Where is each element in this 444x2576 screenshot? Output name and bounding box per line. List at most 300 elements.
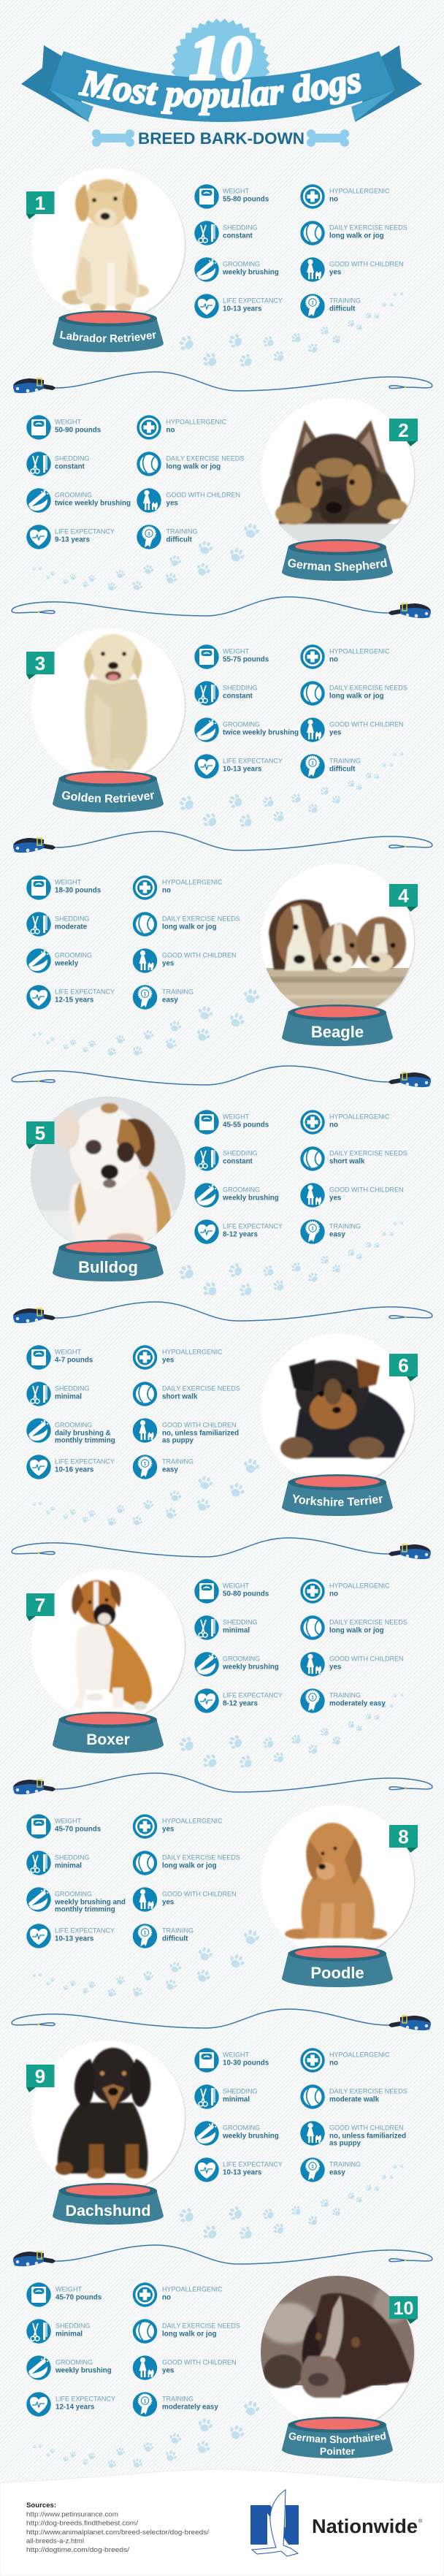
stats: [26, 2282, 240, 2417]
bowl: Yorkshire Terrier: [282, 1474, 393, 1516]
icon: left bone: [92, 129, 134, 147]
bowl: Yorkshire Terrier: Yorkshire Terrier: [292, 1495, 383, 1506]
hypoallergenic: [133, 1345, 223, 1370]
grooming: GROOMING: [223, 1655, 260, 1662]
panel: 7 Boxer: [26, 1569, 407, 1772]
panel: 2 German Shepherd: [26, 398, 418, 590]
hypoallergenic: HYPOALLERGENIC: [162, 1348, 223, 1355]
life expectancy: LIFE EXPECTANCY: [223, 757, 283, 764]
life expectancy: 10-13 years: [223, 305, 262, 313]
weight: [194, 1579, 269, 1604]
bowl: Dachshund: Dachshund: [65, 2202, 151, 2219]
grooming: twice weekly brushing: [55, 500, 131, 507]
life expectancy: 8-12 years: [223, 1230, 258, 1239]
children: yes: [329, 729, 342, 736]
training: TRAINING: [162, 1457, 194, 1465]
dog: boxer: [72, 1580, 152, 1710]
children: yes: [329, 269, 342, 276]
children: [133, 2355, 237, 2380]
training: easy: [329, 1230, 345, 1239]
sources: http://dogtime.com/dog-breeds/: [26, 2546, 129, 2554]
weight: WEIGHT: [55, 1348, 81, 1355]
photo and bowl: [31, 628, 403, 827]
icon: right bone: [307, 129, 349, 147]
bowl: German Shorthaired Pointer: Pointer: [320, 2445, 356, 2457]
grooming: [194, 2121, 279, 2146]
exercise: DAILY EXERCISE NEEDS: [162, 1384, 240, 1392]
training: [300, 754, 361, 779]
bowl: Bulldog: Bulldog: [78, 1258, 138, 1276]
training: 1: [144, 2399, 147, 2404]
training: 1: [311, 301, 314, 305]
paw trail: [176, 751, 405, 831]
training: 1: [148, 532, 150, 536]
weight: WEIGHT: [55, 878, 81, 885]
shedding: [26, 1851, 90, 1875]
shedding: SHEDDING: [223, 2087, 258, 2095]
hypoallergenic: HYPOALLERGENIC: [162, 1817, 223, 1824]
exercise: long walk or jog: [162, 2331, 217, 2338]
training: TRAINING: [162, 2395, 194, 2402]
dog: golden retriever: [84, 634, 148, 771]
life expectancy: LIFE EXPECTANCY: [223, 297, 283, 304]
photo and bowl: [31, 864, 415, 1058]
grooming: [26, 1887, 126, 1914]
badge 9: 9: [35, 2065, 45, 2087]
life expectancy: LIFE EXPECTANCY: [56, 2395, 115, 2402]
header: [21, 19, 422, 148]
shedding: [194, 221, 258, 245]
shedding: minimal: [55, 1861, 82, 1870]
badge 7: 7: [35, 1594, 45, 1616]
photo and bowl: [31, 1805, 415, 1999]
photo and bowl: [31, 1097, 405, 1300]
bowl: Golden Retriever: Golden Retriever: [62, 791, 154, 802]
exercise: long walk or jog: [162, 1861, 217, 1870]
hypoallergenic: no: [162, 887, 171, 894]
grooming: weekly brushing: [222, 269, 279, 276]
grooming: twice weekly brushing: [223, 729, 299, 736]
paw trail: [176, 1692, 405, 1772]
grooming: GROOMING: [55, 491, 92, 498]
grooming: [194, 1652, 279, 1677]
life expectancy: [26, 525, 115, 549]
hypoallergenic: [133, 2282, 223, 2307]
stats: [194, 644, 407, 779]
life expectancy: 8-12 years: [223, 1699, 258, 1708]
leash divider 6: [12, 1538, 431, 1559]
bowl: German Shorthaired Pointer: [282, 2417, 393, 2458]
children: [133, 1887, 237, 1912]
shedding: moderate: [55, 923, 88, 931]
badge 6: [389, 1354, 418, 1382]
shedding: constant: [223, 693, 253, 700]
stats: [26, 415, 244, 549]
paw trail: [176, 1220, 405, 1300]
bowl: Labrador Retriever: Labrador Retriever: [60, 330, 156, 342]
badge 6: 6: [398, 1354, 409, 1376]
hypoallergenic: HYPOALLERGENIC: [162, 2285, 223, 2293]
children: GOOD WITH CHILDREN: [329, 1186, 404, 1193]
leash divider 4: [12, 1066, 431, 1087]
dog: bulldog: [41, 1102, 175, 1242]
grooming: weekly brushing and: [54, 1898, 126, 1907]
children: [300, 1652, 404, 1677]
shedding: SHEDDING: [55, 915, 90, 922]
grooming: weekly brushing: [55, 2367, 112, 2374]
hypoallergenic: HYPOALLERGENIC: [166, 418, 227, 425]
shedding: SHEDDING: [55, 454, 90, 462]
exercise: [137, 451, 244, 476]
paw trail: [31, 987, 261, 1058]
children: [300, 1183, 404, 1208]
sources: http://www.petinsurance.com: [26, 2510, 118, 2519]
shedding: SHEDDING: [56, 2322, 91, 2329]
exercise: [300, 2084, 407, 2109]
training: easy: [162, 997, 178, 1004]
grooming: GROOMING: [55, 1890, 92, 1897]
exercise: long walk or jog: [166, 463, 221, 470]
children: as puppy: [329, 2139, 361, 2148]
training: TRAINING: [162, 1927, 194, 1934]
hypoallergenic: no: [329, 1590, 338, 1598]
shedding: minimal: [223, 2095, 250, 2104]
photo and bowl: [31, 1569, 405, 1772]
weight: [26, 415, 102, 440]
training: moderately easy: [329, 1699, 386, 1708]
photo and bowl: [261, 398, 415, 581]
badge 8: [389, 1825, 418, 1853]
children: yes: [166, 500, 178, 507]
grooming: weekly brushing: [222, 1663, 279, 1672]
panel: 3 Golden Retriever: [26, 628, 407, 827]
exercise: DAILY EXERCISE NEEDS: [162, 915, 240, 922]
training: TRAINING: [166, 527, 198, 535]
children: no, unless familiarized: [162, 1429, 239, 1438]
grooming: [26, 2355, 112, 2380]
children: no, unless familiarized: [329, 2132, 406, 2141]
grooming: GROOMING: [223, 1186, 260, 1193]
life expectancy: [26, 2392, 115, 2417]
shedding: constant: [55, 463, 85, 470]
hypoallergenic: [137, 415, 227, 440]
hypoallergenic: [300, 644, 390, 669]
training: 1: [311, 1695, 314, 1701]
badge 1: 1: [35, 192, 45, 214]
sources: all-breeds-a-z.html: [26, 2537, 84, 2545]
bowl: German Shepherd: [282, 539, 393, 581]
weight: [194, 2048, 269, 2073]
photo and bowl: [31, 168, 185, 352]
weight: [26, 875, 102, 900]
bowl: Golden Retriever: [53, 771, 164, 812]
children: [300, 2121, 406, 2148]
paw trail: [176, 291, 405, 370]
weight: WEIGHT: [223, 647, 249, 655]
hypoallergenic: HYPOALLERGENIC: [329, 647, 390, 655]
children: [300, 717, 404, 742]
ribbon banner: [21, 45, 422, 122]
leash divider 2: [12, 597, 431, 618]
weight: 55-80 pounds: [223, 196, 269, 203]
weight: 45-70 pounds: [56, 2294, 102, 2301]
children: as puppy: [162, 1436, 194, 1445]
children: GOOD WITH CHILDREN: [329, 2124, 404, 2131]
hypoallergenic: HYPOALLERGENIC: [329, 2051, 390, 2058]
life expectancy: [26, 1924, 115, 1948]
wordmark: Nationwide: [312, 2515, 418, 2537]
training: TRAINING: [162, 988, 194, 995]
hypoallergenic: [133, 875, 223, 900]
weight: 4-7 pounds: [55, 1356, 93, 1365]
bowl: Beagle: Beagle: [311, 1023, 364, 1041]
training: difficult: [162, 1935, 188, 1943]
grooming: weekly brushing: [222, 2132, 279, 2141]
leash divider 8: [12, 2009, 431, 2030]
bowl: Poodle: [282, 1946, 393, 1987]
shedding: [26, 912, 90, 937]
shedding: minimal: [55, 1392, 82, 1401]
training: [300, 1688, 386, 1713]
training: difficult: [329, 766, 356, 773]
badge 3: [26, 652, 54, 679]
exercise: DAILY EXERCISE NEEDS: [329, 224, 407, 231]
bowl: Beagle: [282, 1005, 393, 1046]
training: easy: [162, 1466, 178, 1474]
children: GOOD WITH CHILDREN: [329, 260, 404, 267]
grooming: GROOMING: [223, 2124, 260, 2131]
shedding: constant: [223, 1157, 253, 1166]
children: yes: [162, 1898, 175, 1907]
title: Most popular dogs: Most popular dogs: [77, 70, 361, 115]
weight: WEIGHT: [56, 2285, 82, 2293]
training: difficult: [166, 536, 193, 544]
life expectancy: 9-13 years: [55, 536, 90, 544]
exercise: DAILY EXERCISE NEEDS: [162, 1853, 240, 1861]
hypoallergenic: [133, 1814, 223, 1839]
paw trail: [176, 2163, 405, 2243]
title: 10: 10: [189, 23, 252, 93]
children: GOOD WITH CHILDREN: [329, 1655, 404, 1662]
shedding: SHEDDING: [223, 1618, 258, 1626]
weight: 50-80 pounds: [223, 1590, 269, 1598]
grooming: [26, 1418, 115, 1445]
grooming: [26, 948, 92, 973]
photo and bowl: [32, 1333, 415, 1525]
training: [133, 985, 194, 1010]
sources: [26, 2501, 209, 2554]
weight: WEIGHT: [223, 1113, 249, 1120]
exercise: [300, 221, 407, 245]
badge 8: 8: [398, 1826, 409, 1848]
stats: [194, 1110, 407, 1244]
grooming: GROOMING: [223, 720, 260, 728]
panel: 5 Bulldog: [26, 1097, 407, 1300]
hypoallergenic: HYPOALLERGENIC: [329, 187, 390, 194]
shedding: SHEDDING: [55, 1384, 90, 1392]
training: [300, 294, 361, 319]
sunburst behind 10: [171, 18, 270, 118]
life expectancy: [26, 985, 115, 1010]
hypoallergenic: no: [329, 656, 338, 663]
exercise: DAILY EXERCISE NEEDS: [329, 1618, 407, 1626]
exercise: DAILY EXERCISE NEEDS: [329, 684, 407, 691]
weight: [194, 1110, 269, 1135]
exercise: [133, 1851, 240, 1875]
life expectancy: LIFE EXPECTANCY: [55, 1927, 115, 1934]
paw trail: [31, 522, 261, 592]
exercise: DAILY EXERCISE NEEDS: [166, 454, 244, 462]
grooming: GROOMING: [56, 2358, 93, 2366]
shedding: minimal: [223, 1626, 250, 1635]
bowl: German Shorthaired Pointer: German Shorthaired: [289, 2431, 386, 2443]
grooming: weekly brushing: [222, 1194, 279, 1203]
hypoallergenic: yes: [162, 1356, 175, 1365]
stats: [194, 184, 407, 319]
exercise: long walk or jog: [329, 232, 384, 240]
badge 2: 2: [398, 419, 409, 441]
training: TRAINING: [329, 2160, 361, 2168]
training: 1: [311, 1226, 314, 1232]
exercise: [133, 1382, 240, 1406]
weight: WEIGHT: [55, 1817, 81, 1824]
paw trail: [31, 1457, 261, 1528]
leash divider 3: [13, 831, 432, 853]
leash divider 9: [13, 2245, 432, 2266]
panel: 9 Dachshund: [26, 2040, 407, 2243]
training: TRAINING: [329, 1691, 361, 1699]
exercise: [133, 912, 240, 937]
panel: 4 Beagle: [26, 864, 418, 1058]
weight: WEIGHT: [223, 187, 249, 194]
exercise: short walk: [162, 1392, 198, 1401]
grooming: weekly: [54, 960, 79, 967]
children: GOOD WITH CHILDREN: [162, 951, 237, 959]
badge 1: [26, 191, 54, 219]
training: easy: [329, 2168, 345, 2177]
training: 1: [311, 2164, 314, 2170]
footer white wave: [0, 2469, 444, 2576]
photo and bowl: [32, 2276, 415, 2468]
life expectancy: [26, 1455, 115, 1479]
hypoallergenic: yes: [162, 1825, 175, 1834]
badge 5: [26, 1121, 54, 1149]
grooming: [194, 257, 279, 282]
weight: WEIGHT: [223, 2051, 249, 2058]
life expectancy: LIFE EXPECTANCY: [55, 988, 115, 995]
exercise: DAILY EXERCISE NEEDS: [329, 1149, 407, 1156]
leash divider 7: [13, 1773, 432, 1794]
stats: [26, 875, 240, 1010]
dog: german shepherd: [275, 419, 407, 542]
exercise: long walk or jog: [329, 1626, 384, 1635]
sources: Sources:: [26, 2501, 56, 2510]
panel: 6 Yorkshire Terrier: [26, 1333, 418, 1525]
training: [300, 2157, 361, 2182]
bowl: Dachshund: [53, 2183, 164, 2225]
shedding: SHEDDING: [223, 1149, 258, 1156]
weight: [26, 2282, 102, 2307]
exercise: long walk or jog: [162, 923, 217, 931]
bowl: Bulldog: [53, 1240, 164, 1281]
stats: [194, 1579, 407, 1713]
children: [133, 1418, 239, 1445]
children: yes: [162, 960, 175, 967]
children: [133, 948, 237, 973]
stats: [194, 2048, 407, 2182]
leash divider 5: [13, 1302, 432, 1323]
shedding: [194, 2084, 258, 2109]
children: [137, 488, 240, 513]
weight: 50-90 pounds: [55, 427, 102, 434]
hypoallergenic: HYPOALLERGENIC: [329, 1113, 390, 1120]
grooming: [194, 1183, 279, 1208]
shedding: SHEDDING: [223, 684, 258, 691]
badge 10: [389, 2296, 418, 2324]
training: [133, 1924, 194, 1948]
subtitle: BREED BARK-DOWN: [138, 129, 305, 148]
children: GOOD WITH CHILDREN: [162, 1421, 237, 1428]
exercise: [300, 681, 407, 706]
grooming: GROOMING: [223, 260, 260, 267]
exercise: [300, 1146, 407, 1171]
hypoallergenic: no: [166, 427, 175, 434]
badge 5: 5: [35, 1122, 45, 1144]
grooming: daily brushing &: [55, 1429, 111, 1438]
hypoallergenic: [300, 1579, 390, 1604]
weight: WEIGHT: [223, 1582, 249, 1589]
panel: 10 German Shorthaired Pointer: [26, 2276, 418, 2468]
stats: [26, 1345, 240, 1479]
hypoallergenic: [300, 184, 390, 209]
life expectancy: LIFE EXPECTANCY: [223, 1691, 283, 1699]
badge 7: [26, 1593, 54, 1621]
grooming: [194, 717, 299, 742]
shedding: [26, 451, 90, 476]
badge 4: 4: [398, 885, 409, 907]
badge 4: [389, 884, 418, 912]
weight: 55-75 pounds: [223, 656, 269, 663]
training: moderately easy: [162, 2404, 218, 2411]
training: 1: [144, 992, 147, 997]
exercise: [133, 2319, 240, 2344]
weight: WEIGHT: [55, 418, 81, 425]
grooming: [26, 488, 131, 513]
training: TRAINING: [329, 1222, 361, 1230]
children: GOOD WITH CHILDREN: [162, 2358, 237, 2366]
dog: german shorthaired pointer: [261, 2276, 415, 2398]
life expectancy: 12-14 years: [56, 2404, 95, 2411]
badge 2: [389, 419, 418, 446]
exercise: DAILY EXERCISE NEEDS: [329, 2087, 407, 2095]
training: 1: [311, 761, 314, 766]
training: [300, 1219, 361, 1244]
hypoallergenic: no: [329, 1121, 338, 1129]
exercise: DAILY EXERCISE NEEDS: [162, 2322, 240, 2329]
paw trail: [31, 1928, 261, 1999]
grooming: monthly trimming: [55, 1905, 115, 1914]
life expectancy: LIFE EXPECTANCY: [55, 527, 115, 535]
badge 9: [26, 2065, 54, 2092]
life expectancy: 10-13 years: [55, 1935, 94, 1943]
bowl: Boxer: [53, 1712, 164, 1753]
weight: [194, 184, 269, 209]
life expectancy: LIFE EXPECTANCY: [55, 1457, 115, 1465]
training: 1: [144, 1461, 147, 1467]
children: yes: [329, 1194, 342, 1203]
logo: Nationwide: [250, 2490, 423, 2556]
badge 3: 3: [35, 652, 45, 674]
